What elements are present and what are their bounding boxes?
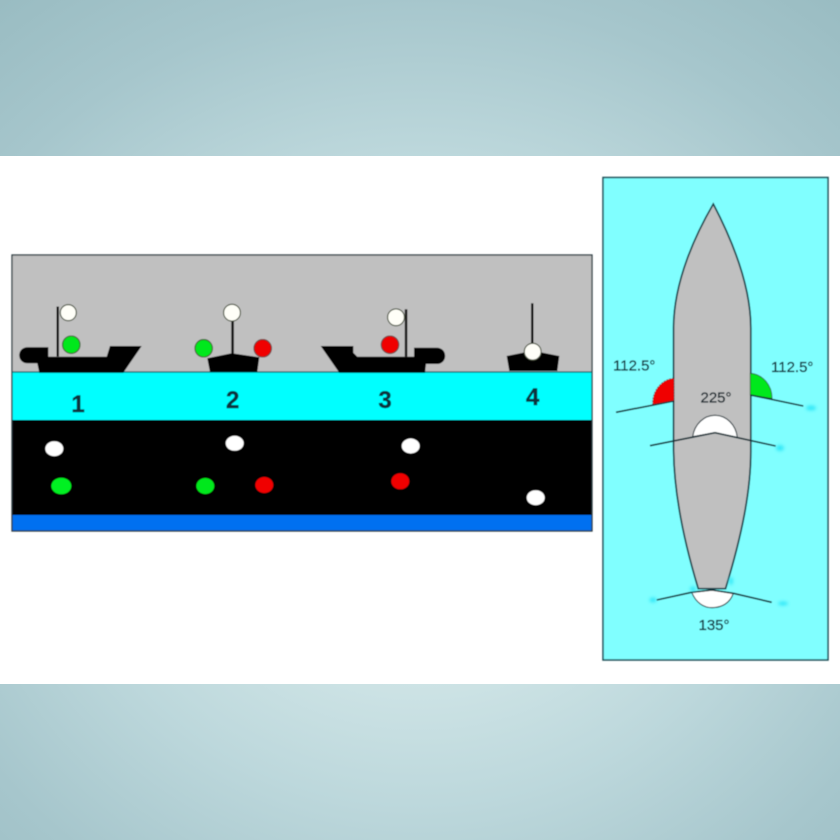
panel border [12,255,592,531]
night lights 3 [391,438,420,489]
band: grey daytime sky [12,255,592,372]
white masthead sector [693,415,737,437]
night lights 2 [196,436,273,494]
waterline [12,371,592,373]
night lights 4 [527,490,545,505]
vessel 3: port side view [321,309,445,373]
vessel 2: head-on view [195,304,271,372]
vessel 1: starboard side view [19,305,142,373]
night lights 1 [45,441,71,494]
band: blue sea [12,515,592,531]
green starboard sector [750,373,772,398]
white stern sector [692,590,733,608]
number 1: 1 [71,391,85,418]
panel: light arcs plan view [603,178,828,660]
red port sector [653,378,674,404]
label: starboard 112.5 degrees: 112.5° [771,359,813,376]
cyan glow ends [650,406,816,606]
ship hull plan [674,204,751,589]
background top band [0,0,840,156]
label: 225 degrees: 225° [700,390,732,406]
plan background [603,178,828,660]
band: cyan water with numbers [12,372,592,420]
white content panel [0,156,840,684]
label: port 112.5 degrees: 112.5° [613,358,655,374]
number 4: 4 [526,384,540,411]
panel: vessel light views [12,255,592,531]
sector limit lines [616,395,803,602]
number 2: 2 [226,387,239,414]
number 3: 3 [378,387,392,414]
background bottom band [0,684,840,840]
label: 135 degrees: 135° [698,617,730,634]
band: black night view [12,420,592,515]
vessel 4: stern view [507,303,559,371]
